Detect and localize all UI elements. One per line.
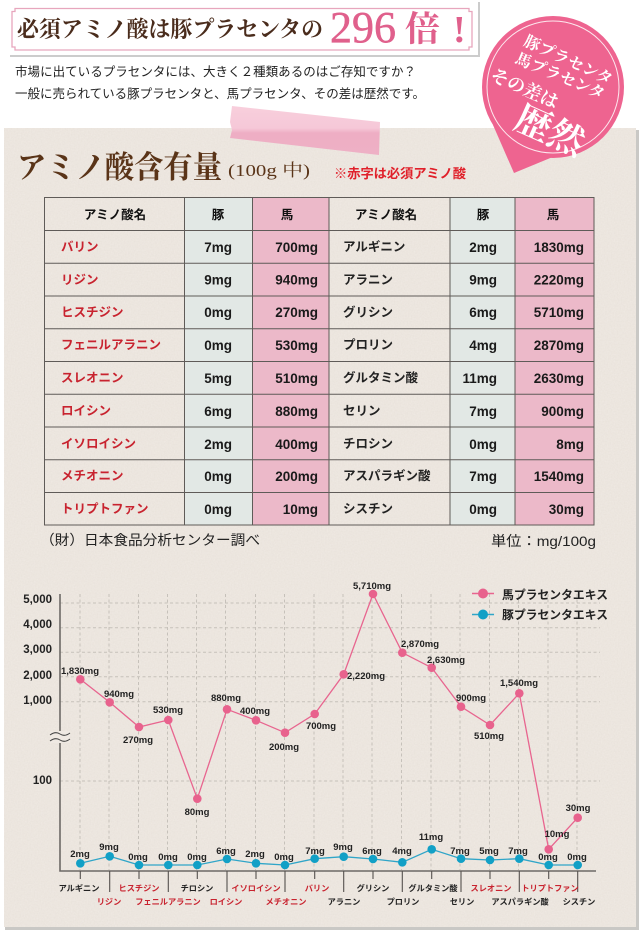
y axis: 4,000: [23, 619, 52, 631]
table rows: シスチン: [343, 502, 393, 516]
table rows: 2630mg: [534, 371, 584, 386]
series: horse placenta: 940mg: [104, 689, 134, 700]
table rows: 5710mg: [534, 305, 584, 320]
table rows: 10mg: [283, 502, 318, 517]
series: horse placenta: [61, 581, 591, 854]
series: horse placenta: 80mg: [185, 807, 210, 818]
title banner: 296: [330, 3, 396, 52]
table rows: 0mg: [204, 469, 232, 484]
x axis labels: トリプトファン: [521, 884, 579, 893]
table header: 豚: [477, 208, 490, 222]
table rows: リジン: [61, 273, 99, 287]
x axis labels: [59, 883, 595, 906]
table rows: 2220mg: [534, 272, 584, 288]
x axis labels: リジン: [97, 898, 121, 906]
series: pig placenta: 2mg: [245, 849, 265, 860]
table rows: 2870mg: [534, 338, 584, 353]
table rows: 0mg: [204, 305, 232, 320]
table rows: アスパラギン酸: [343, 468, 431, 483]
table rows: セリン: [343, 404, 381, 418]
title banner: 倍: [405, 10, 440, 49]
table rows: 9mg: [204, 272, 232, 288]
title banner: !: [453, 9, 466, 51]
series: pig placenta: 9mg: [333, 842, 353, 853]
series: pig placenta: [70, 832, 587, 869]
table rows: メチオニン: [61, 469, 124, 483]
table rows: スレオニン: [61, 371, 124, 385]
table rows: 880mg: [275, 404, 318, 419]
series: pig placenta: 7mg: [508, 846, 528, 857]
series: pig placenta: 9mg: [99, 842, 119, 853]
series: horse placenta: 900mg: [456, 693, 486, 704]
table rows: アラニン: [343, 273, 393, 287]
unit note: 単位：mg/100g: [491, 533, 596, 549]
x axis labels: グルタミン酸: [408, 883, 458, 893]
y axis: [23, 594, 596, 871]
speech bubble: 豚プラセンタ: [521, 32, 615, 89]
series: horse placenta: 200mg: [269, 742, 299, 753]
table rows: 2mg: [204, 437, 232, 452]
intro text: 市場に出ているプラセンタには、大きく２種類あるのはご存知ですか？: [15, 64, 416, 79]
intro text: 一般に売られている豚プラセンタと、馬プラセンタ、その差は歴然です。: [15, 86, 425, 101]
x axis labels: グリシン: [357, 883, 389, 893]
x axis labels: アスパラギン酸: [491, 896, 549, 906]
table rows: 9mg: [469, 272, 497, 288]
table rows: ヒスチジン: [61, 306, 124, 320]
table rows: 8mg: [556, 437, 584, 452]
table rows: 530mg: [275, 338, 318, 353]
series: horse placenta: 270mg: [123, 735, 153, 746]
series: horse placenta: 2,630mg: [427, 655, 465, 666]
table header: [84, 207, 559, 222]
x axis labels: イソロイシン: [231, 884, 281, 893]
table rows: 400mg: [275, 437, 318, 452]
table rows: フェニルアラニン: [61, 338, 161, 352]
table header: アミノ酸名: [355, 207, 417, 222]
legend: 馬プラセンタエキス: [502, 588, 608, 602]
x axis labels: プロリン: [387, 898, 419, 906]
table rows: 700mg: [275, 240, 318, 255]
table rows: ロイシン: [61, 404, 111, 418]
intro text: [15, 64, 425, 101]
table rows: イソロイシン: [61, 437, 136, 451]
title banner: 必須アミノ酸は豚プラセンタの: [17, 17, 323, 42]
table rows: 0mg: [469, 437, 497, 452]
series: horse placenta: 2,870mg: [401, 639, 439, 650]
y axis: 2,000: [23, 670, 52, 682]
table rows: 6mg: [469, 305, 497, 320]
y axis: 5,000: [23, 594, 52, 606]
series: horse placenta: 10mg: [545, 829, 570, 840]
table rows: チロシン: [343, 437, 393, 451]
x axis ticks: [80, 871, 578, 892]
series: pig placenta: 4mg: [392, 846, 412, 857]
x axis labels: ヒスチジン: [119, 884, 159, 893]
series: pig placenta: 0mg: [158, 852, 178, 863]
series: pig placenta: 2mg: [70, 849, 90, 860]
x axis labels: フェニルアラニン: [135, 898, 201, 906]
series: pig placenta: 0mg: [274, 852, 294, 863]
x axis labels: メチオニン: [266, 898, 306, 906]
series: horse placenta: 530mg: [153, 705, 183, 716]
title banner: [8, 0, 480, 57]
series: horse placenta: 400mg: [240, 706, 270, 717]
series: horse placenta: 1,830mg: [61, 666, 99, 677]
table header: 馬: [547, 208, 559, 222]
amino acid table: [44, 198, 594, 525]
series: pig placenta: 6mg: [362, 846, 382, 857]
table header: 馬: [281, 208, 293, 222]
series: pig placenta: 0mg: [567, 852, 587, 863]
table rows: 510mg: [275, 371, 318, 386]
table rows: 0mg: [469, 502, 497, 517]
series: pig placenta: 0mg: [187, 852, 207, 863]
legend: [472, 588, 608, 622]
table rows: 940mg: [275, 272, 318, 288]
table rows: 0mg: [204, 338, 232, 353]
table header: 豚: [212, 208, 225, 222]
x axis labels: アラニン: [328, 898, 360, 906]
speech bubble: その差は: [487, 65, 561, 112]
section heading: アミノ酸含有量: [17, 150, 222, 185]
table rows: プロリン: [343, 338, 393, 352]
y axis: 100: [33, 775, 52, 787]
series: horse placenta: 1,540mg: [500, 678, 538, 689]
speech bubble: [482, 16, 624, 173]
series: pig placenta: 5mg: [479, 846, 499, 857]
series: pig placenta: 11mg: [419, 832, 443, 843]
table rows: 900mg: [541, 404, 584, 419]
series: horse placenta: 30mg: [566, 803, 591, 814]
series: pig placenta: 6mg: [216, 846, 236, 857]
x axis labels: チロシン: [181, 884, 213, 893]
table rows: 200mg: [275, 469, 318, 484]
x axis labels: セリン: [450, 898, 474, 906]
series: pig placenta: 7mg: [305, 846, 325, 857]
line chart: [23, 581, 608, 906]
table rows: 5mg: [204, 371, 232, 386]
table rows: グリシン: [343, 304, 393, 320]
table rows: アルギニン: [343, 240, 405, 254]
x axis labels: バリン: [305, 884, 329, 893]
series: horse placenta: 510mg: [474, 731, 504, 742]
y axis: 1,000: [23, 695, 52, 707]
speech bubble: 馬プラセンタ: [513, 49, 607, 103]
x axis labels: スレオニン: [471, 884, 511, 893]
table rows: 7mg: [204, 240, 232, 255]
red note: ※赤字は必須アミノ酸: [334, 166, 466, 181]
x axis labels: アルギニン: [59, 884, 99, 893]
table rows: 4mg: [469, 338, 497, 353]
table rows: [61, 240, 584, 517]
masking tape: [230, 106, 380, 155]
series: pig placenta: 0mg: [538, 852, 558, 863]
x axis labels: ロイシン: [210, 898, 242, 906]
series: pig placenta: 0mg: [128, 852, 148, 863]
series: horse placenta: 5,710mg: [353, 581, 391, 592]
table rows: 270mg: [275, 305, 318, 320]
table rows: 7mg: [469, 404, 497, 419]
source note: （財）日本食品分析センター調べ: [40, 532, 260, 548]
table rows: 1830mg: [534, 240, 584, 255]
series: horse placenta: 2,220mg: [347, 671, 385, 682]
legend: 豚プラセンタエキス: [502, 608, 608, 622]
series: pig placenta: 7mg: [450, 846, 470, 857]
table header: アミノ酸名: [84, 207, 146, 222]
table rows: 11mg: [462, 371, 497, 386]
section heading: (100g 中): [228, 161, 310, 180]
series: horse placenta: 700mg: [306, 721, 336, 732]
table rows: 1540mg: [534, 469, 584, 484]
table rows: 7mg: [469, 469, 497, 484]
series: horse placenta: 880mg: [211, 693, 241, 704]
table rows: 0mg: [204, 502, 232, 517]
table rows: 2mg: [469, 240, 497, 255]
y axis: 3,000: [23, 644, 52, 656]
table rows: バリン: [61, 240, 99, 254]
x axis labels: シスチン: [563, 898, 595, 906]
table rows: 30mg: [549, 502, 584, 517]
speech bubble: 歴然: [509, 98, 593, 165]
table rows: グルタミン酸: [343, 370, 419, 385]
table rows: 6mg: [204, 404, 232, 419]
table rows: トリプトファン: [61, 502, 149, 516]
